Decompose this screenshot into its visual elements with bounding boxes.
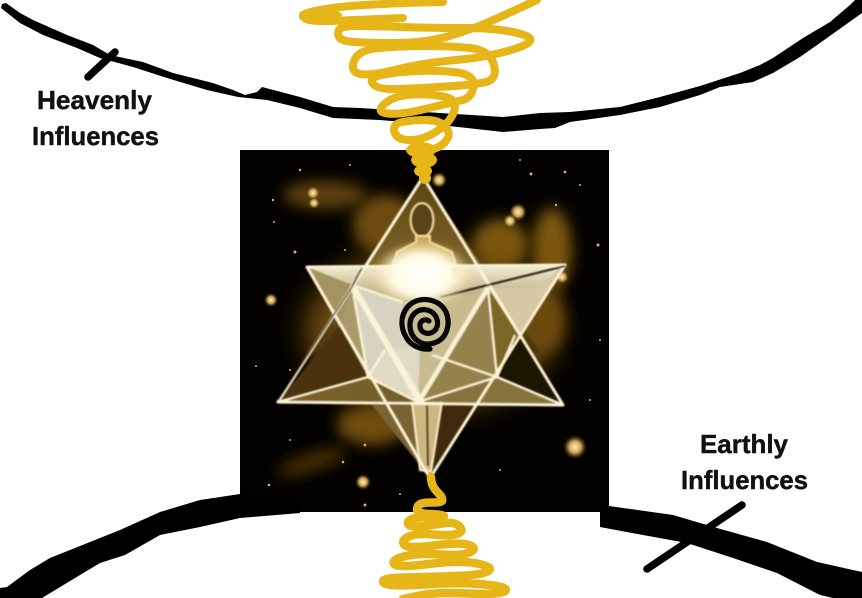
label: heavenly influences — [32, 85, 159, 151]
label: earthly influences: Influences — [681, 465, 808, 495]
human figure — [390, 203, 458, 472]
earthly boundary curve — [0, 492, 862, 598]
tick: heavenly — [88, 52, 115, 77]
label: earthly influences — [681, 429, 808, 495]
star edges — [278, 177, 565, 478]
black spiral — [402, 300, 448, 349]
label: earthly influences: Earthly — [700, 429, 789, 459]
scattered stars — [255, 159, 601, 506]
starfield image panel — [240, 150, 609, 512]
merkaba star — [278, 177, 565, 478]
tick: earthly — [647, 505, 742, 569]
heavenly boundary curve — [1, 0, 862, 132]
star faces — [278, 177, 565, 478]
nebula glow — [275, 181, 572, 483]
gold scribble: top — [302, 0, 537, 184]
label: heavenly influences: Influences — [32, 121, 159, 151]
label: heavenly influences: Heavenly — [37, 85, 153, 115]
gold scribble: bottom — [383, 477, 506, 598]
central light glow — [372, 241, 472, 309]
